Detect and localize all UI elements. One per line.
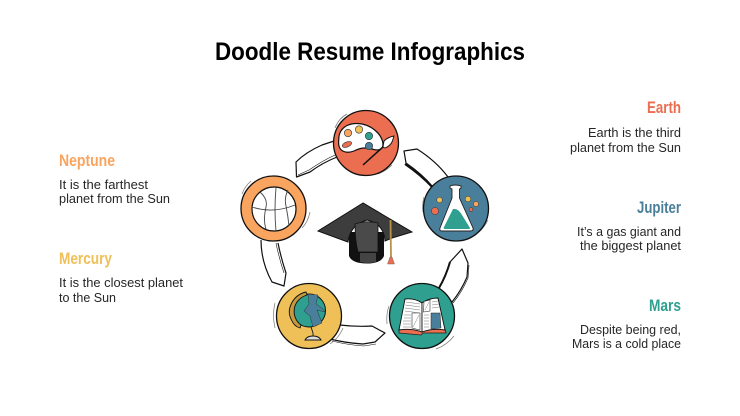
arrow: Earth to Jupiter [404,149,448,187]
text block: Jupiter: Jupiter [637,199,681,217]
text block: Jupiter: the biggest planet [580,239,682,253]
text block: Mercury: to the Sun [59,291,116,305]
text block: Earth: planet from the Sun [570,141,681,155]
text block: Neptune: Neptune [59,152,115,170]
text block: Earth: Earth [647,99,681,117]
text block: Jupiter: It’s a gas giant and [577,225,681,239]
arrow: Mars to Mercury [330,325,385,346]
text block: Mercury: It is the closest planet [59,276,184,290]
arrow: Jupiter to Mars [439,249,469,303]
text block: Mars: Despite being red, [580,323,681,337]
text block: Mars: Mars [649,297,681,315]
icon: Earth palette [334,110,398,176]
icon: Neptune basketball [241,176,310,241]
icon: graduation cap [318,203,412,264]
text block: Neptune: It is the farthest [59,178,149,192]
text block: Mars: Mars is a cold place [572,337,681,351]
text block: Jupiter [577,199,682,253]
text block: Earth [570,99,681,155]
text block: Earth: Earth is the third [588,126,681,140]
text block: Neptune: planet from the Sun [59,192,170,206]
text block: Mercury: Mercury [59,250,113,268]
arrow: Mercury to Neptune [261,240,286,286]
title: Doodle Resume Infographics [215,38,525,66]
icon: Mars book [387,284,454,349]
arrow: Neptune to Earth [296,141,337,177]
text block: Neptune [59,152,170,206]
icon: Mercury globe [274,284,343,348]
text block: Mars [572,297,681,351]
icon: Jupiter flask [423,176,488,241]
text block: Mercury [59,250,184,305]
